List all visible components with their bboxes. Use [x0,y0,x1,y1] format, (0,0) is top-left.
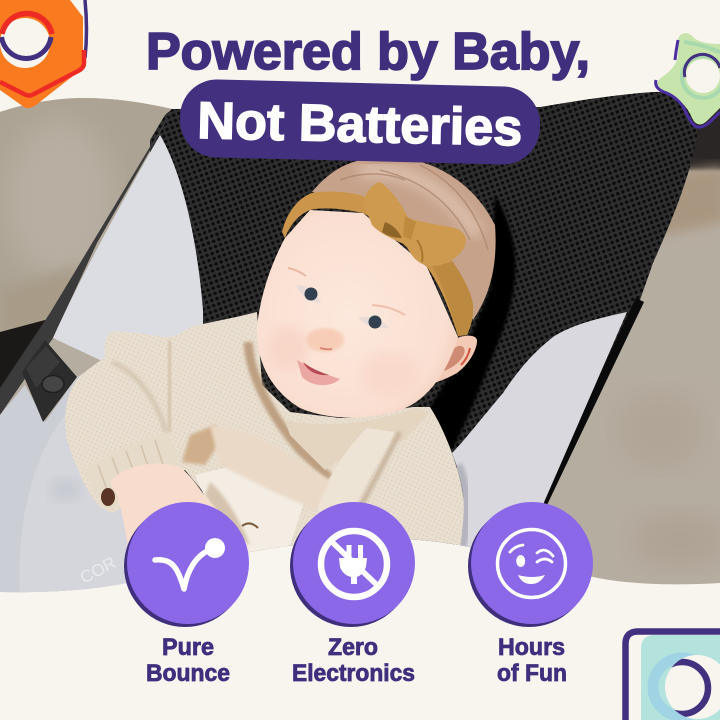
badge: hours of fun [468,502,593,627]
label: hours of fun [497,634,567,687]
photo: baby in bouncer [0,80,720,610]
mouth [297,360,340,385]
icon: bouncing ball [155,538,225,589]
baby face [257,210,458,418]
toy: orange hexagon teether [0,0,86,108]
baby ear [436,336,478,382]
seat buckle [22,340,77,422]
sweater cuff [85,433,179,512]
nose [306,328,344,352]
left eye [288,268,321,303]
badge: zero electronics [290,502,415,627]
label: zero electronics: Electronics [292,660,415,687]
room background [0,80,720,610]
toy: green star teether [656,33,720,127]
baby hair [312,157,496,320]
headline pill: Not Batteries: Not Batteries [197,92,523,157]
baby sweater [65,312,464,570]
badge: pure bounce [124,502,249,627]
headline pill: Not Batteries [179,79,541,165]
label: hours of fun: of Fun [497,660,567,687]
label: pure bounce: Bounce [146,660,230,687]
headline: Powered by Baby, [146,23,590,81]
label: zero electronics [292,634,415,687]
sleeve opening [101,488,115,506]
seat logo: COR [77,553,119,588]
toy: teal square teether [626,632,720,720]
icon: no plug [321,531,387,597]
headband bow [363,182,466,266]
headband [282,192,473,336]
fringe [182,425,218,465]
right eye [358,305,405,328]
icon: winking face [498,530,566,598]
label: pure bounce: Pure [162,634,214,661]
bouncer seat [0,92,697,600]
label: zero electronics: Zero [328,634,378,661]
baby hand [110,464,218,545]
label: pure bounce [146,634,230,687]
label: hours of fun: Hours [498,634,565,661]
